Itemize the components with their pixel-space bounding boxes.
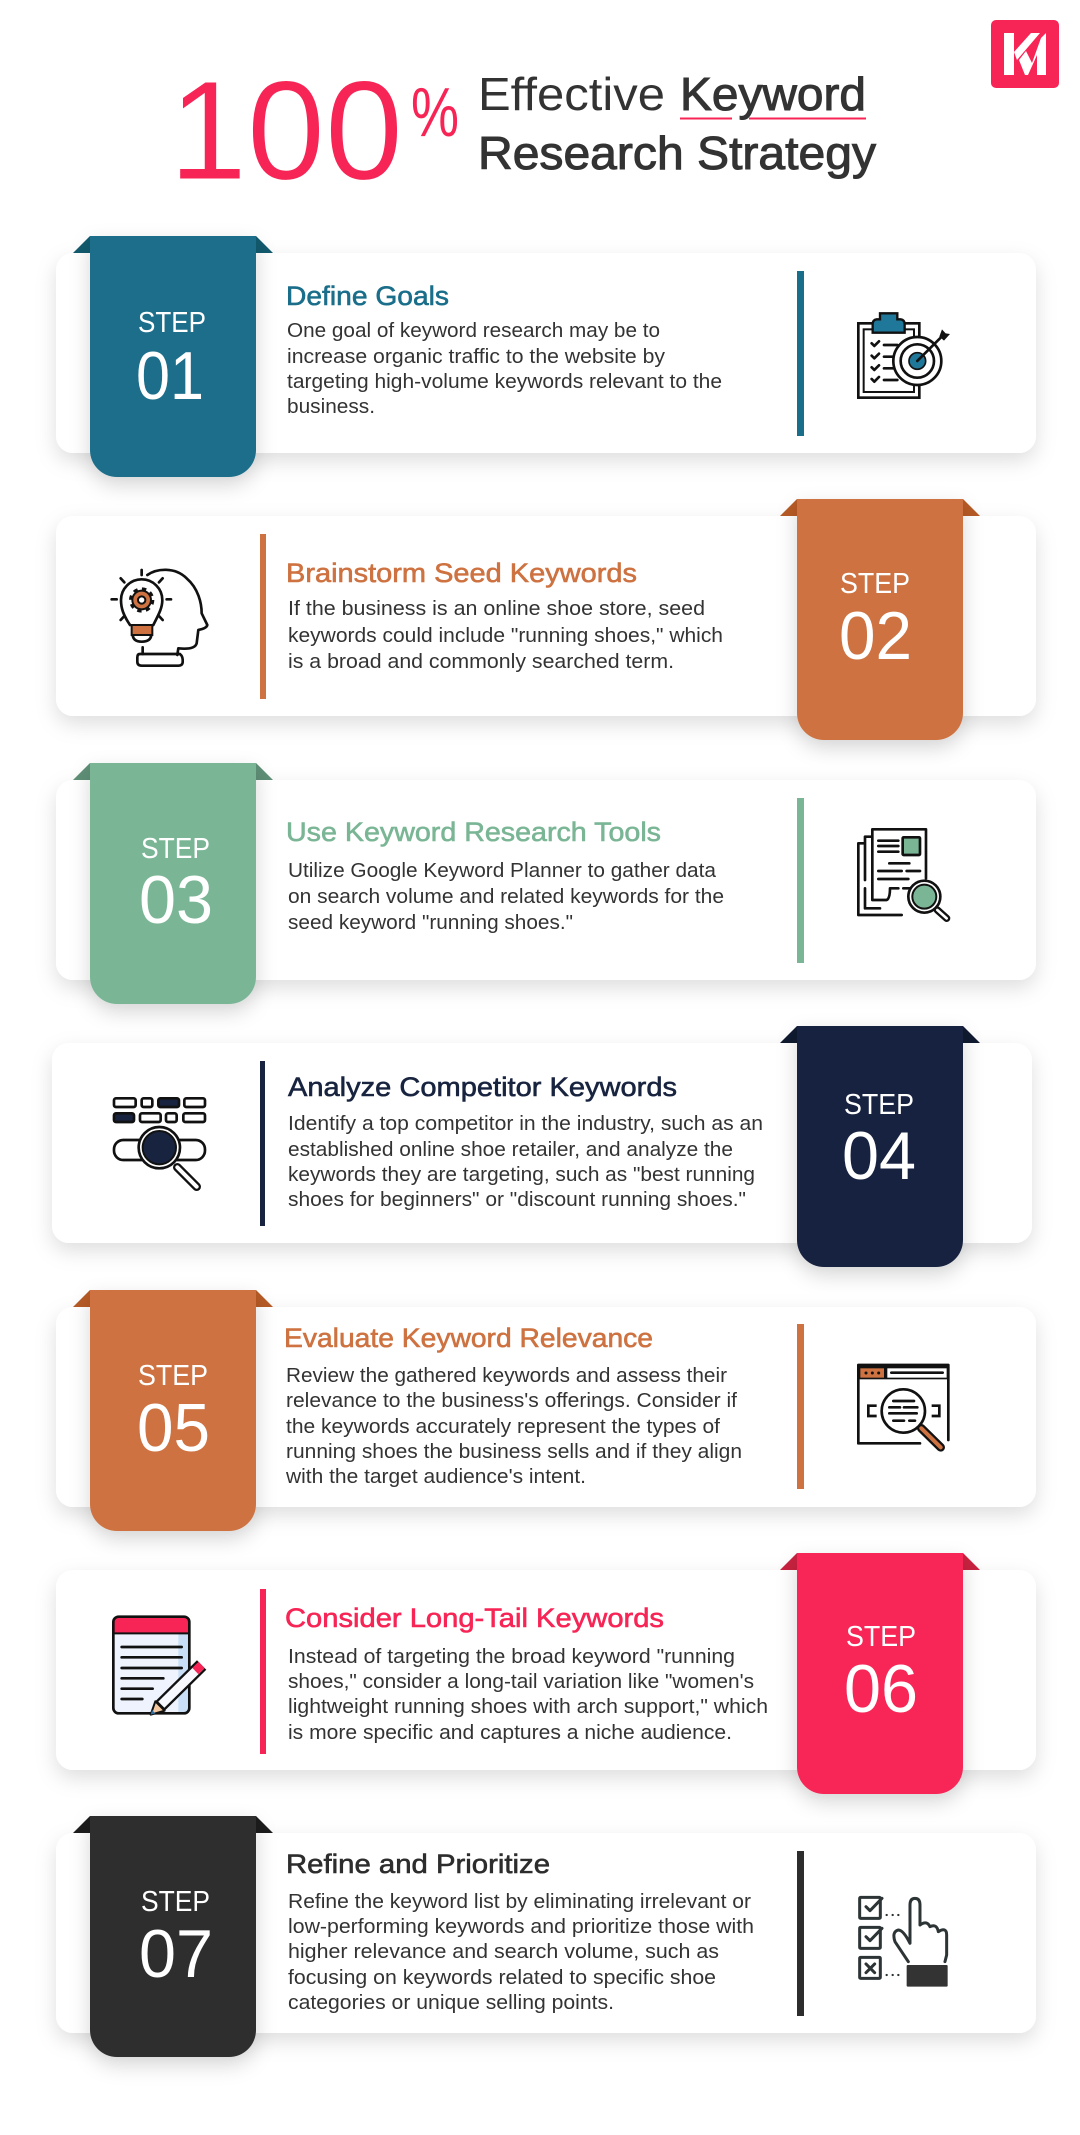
ribbon step 07 — [73, 1816, 273, 2057]
heading: Analyze Competitor Keywords — [288, 1072, 677, 1102]
ribbon step 07: 07 — [139, 1916, 213, 1992]
body text: targeting high-volume keywords relevant to the — [287, 371, 722, 393]
ribbon step 01: 01 — [136, 338, 204, 414]
percent sign: % — [411, 73, 459, 151]
logo — [991, 20, 1059, 88]
body text: with the target audience's intent. — [285, 1466, 586, 1488]
ribbon step 04 — [780, 1026, 980, 1267]
ribbon step 04: 04 — [842, 1118, 916, 1194]
icon: browser window with magnifier — [858, 1365, 948, 1447]
body text: is more specific and captures a niche audience. — [288, 1722, 732, 1744]
icon: checklist with pointing hand — [860, 1897, 948, 1987]
panel: step 4 analyze competitor keywords — [52, 1026, 1032, 1267]
body text: shoes for beginners" or "discount running shoes." — [288, 1189, 746, 1211]
icon: clipboard target — [858, 313, 950, 398]
heading: Define Goals — [286, 281, 449, 311]
ribbon step 03 — [73, 763, 273, 1004]
body text: increase organic traffic to the website by — [287, 346, 665, 368]
body text: low-performing keywords and prioritize those with — [288, 1916, 754, 1938]
icon: documents with magnifier — [858, 829, 947, 918]
ribbon step 01: STEP — [138, 307, 206, 339]
accent bar — [797, 1324, 804, 1489]
body text: If the business is an online shoe store, seed — [288, 598, 705, 620]
body text: keywords could include "running shoes," which — [288, 625, 723, 647]
ribbon step 05: 05 — [137, 1390, 210, 1466]
body text: lightweight running shoes with arch support," which — [288, 1696, 768, 1718]
body text: shoes," consider a long-tail variation like "women's — [288, 1671, 754, 1693]
body text — [288, 598, 723, 673]
ribbon step 03: STEP — [141, 833, 210, 865]
body text — [288, 1891, 754, 2014]
ribbon step 06: 06 — [844, 1651, 918, 1727]
body text: running shoes the business sells and if they align — [286, 1441, 742, 1463]
ribbon step 02: STEP — [840, 568, 910, 600]
accent bar — [797, 271, 804, 436]
body text: focusing on keywords related to specific shoe — [288, 1967, 716, 1989]
body text — [287, 320, 722, 418]
body text — [288, 860, 724, 934]
body text: is a broad and commonly searched term. — [288, 651, 674, 673]
card — [52, 1043, 1032, 1243]
heading text: Research Strategy — [478, 127, 876, 179]
heading text: Effective — [478, 68, 665, 120]
panel: step 5 evaluate keyword relevance — [56, 1290, 1036, 1531]
icon: head with light bulb — [112, 570, 207, 666]
card — [56, 1833, 1036, 2033]
ribbon step 06 — [780, 1553, 980, 1794]
accent bar — [797, 1851, 804, 2016]
icon: keyword blocks with magnifier — [114, 1098, 205, 1187]
body text — [288, 1646, 768, 1744]
accent bar — [260, 534, 266, 699]
panel: step 7 refine and prioritize — [56, 1816, 1036, 2057]
body text: categories or unique selling points. — [288, 1992, 614, 2014]
card — [56, 1307, 1036, 1507]
body text: One goal of keyword research may be to — [287, 320, 660, 342]
heading: Use Keyword Research Tools — [286, 817, 661, 847]
card — [56, 1570, 1036, 1770]
panel: step 6 consider long-tail keywords — [56, 1553, 1036, 1794]
ribbon step 02 — [780, 499, 980, 740]
heading text: Keyword — [680, 68, 866, 120]
panel: step 1 define goals — [56, 236, 1036, 477]
body text — [285, 1365, 742, 1488]
accent bar — [260, 1589, 266, 1754]
ribbon step 02: 02 — [839, 598, 912, 674]
panel: step 2 brainstorm seed keywords — [56, 499, 1036, 740]
heading: Refine and Prioritize — [286, 1849, 550, 1879]
body text: seed keyword "running shoes." — [288, 912, 573, 934]
body text: Instead of targeting the broad keyword "running — [288, 1646, 735, 1668]
body text: higher relevance and search volume, such as — [288, 1941, 719, 1963]
card — [56, 516, 1036, 716]
body text: business. — [287, 396, 375, 418]
heading: Brainstorm Seed Keywords — [286, 558, 637, 588]
body text: relevance to the business's offerings. Consider if — [286, 1390, 737, 1412]
big number 100: 100 — [169, 51, 403, 209]
ribbon step 03: 03 — [139, 862, 213, 938]
body text: on search volume and related keywords for the — [288, 886, 724, 908]
body text: the keywords accurately represent the types of — [286, 1416, 720, 1438]
icon: notepad with pencil — [113, 1617, 202, 1715]
panel: step 3 keyword research tools — [56, 763, 1036, 1004]
card — [56, 780, 1036, 980]
heading: Evaluate Keyword Relevance — [284, 1323, 653, 1353]
ribbon step 05 — [73, 1290, 273, 1531]
heading: Consider Long-Tail Keywords — [285, 1603, 664, 1633]
body text — [288, 1113, 763, 1211]
ribbon step 04: STEP — [844, 1089, 914, 1121]
ribbon step 05: STEP — [138, 1360, 208, 1392]
body text: keywords they are targeting, such as "best running — [288, 1164, 755, 1186]
ribbon step 01 — [73, 236, 273, 477]
body text: Refine the keyword list by eliminating irrelevant or — [288, 1891, 751, 1913]
ribbon step 07: STEP — [141, 1886, 210, 1918]
card — [56, 253, 1036, 453]
accent bar — [260, 1061, 265, 1226]
heading text — [478, 68, 876, 179]
accent bar — [797, 798, 804, 963]
body text: Utilize Google Keyword Planner to gather data — [288, 860, 717, 882]
ribbon step 06: STEP — [846, 1621, 916, 1653]
body text: Identify a top competitor in the industry, such as an — [288, 1113, 763, 1135]
body text: established online shoe retailer, and analyze the — [288, 1139, 733, 1161]
title — [169, 51, 876, 209]
body text: Review the gathered keywords and assess their — [286, 1365, 727, 1387]
